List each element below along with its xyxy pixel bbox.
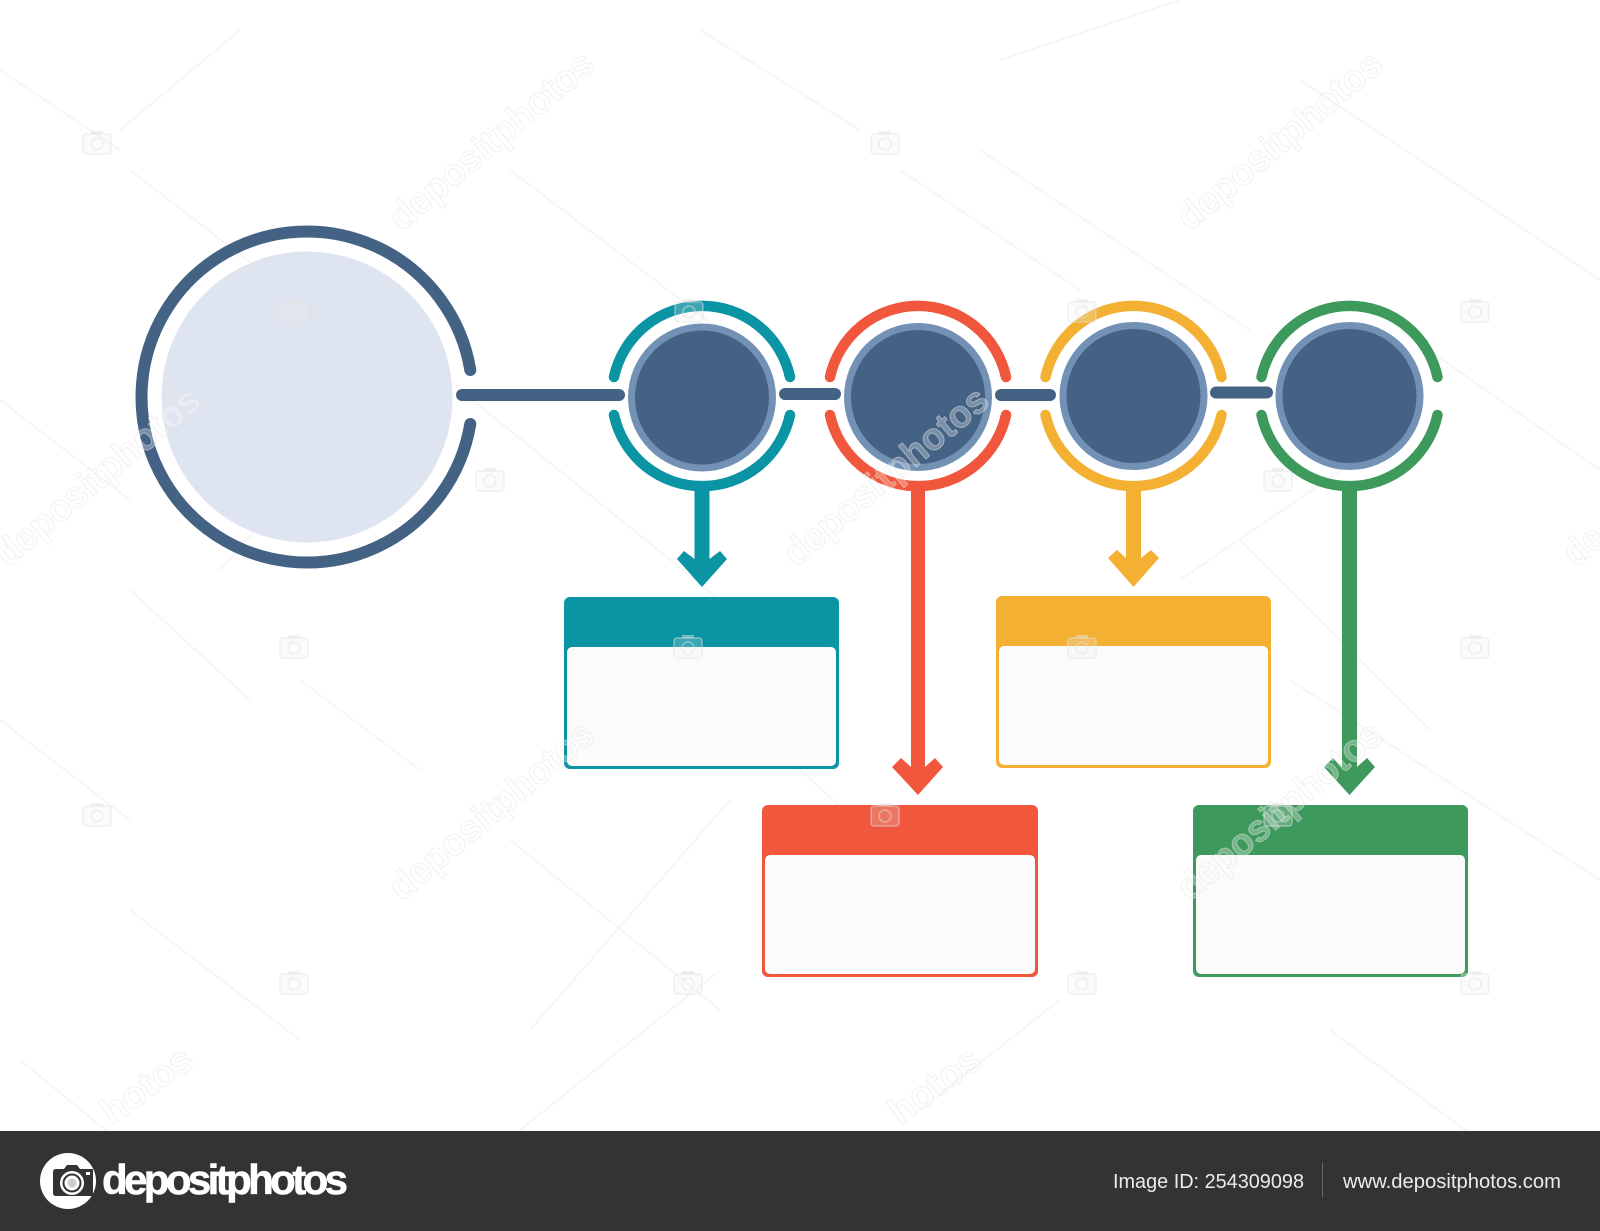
box: teal <box>564 597 839 769</box>
watermarks: depositphotos <box>381 713 603 909</box>
connector: node 3 to node 4 <box>1216 386 1267 398</box>
arrow: node 1 to teal box <box>677 488 727 587</box>
website: www.depositphotos.com <box>1342 1170 1561 1193</box>
watermarks: depositphotos <box>1169 43 1391 239</box>
watermark camera marks <box>83 131 1489 994</box>
image id: Image ID: 254309098 <box>1113 1170 1304 1193</box>
large circle open ring <box>142 232 470 563</box>
watermarks: hotos <box>881 1038 989 1133</box>
node 3: yellow <box>1046 306 1222 486</box>
watermarks: depositphotos <box>1169 713 1391 909</box>
watermarks: hotos <box>93 1038 201 1133</box>
node 4: green <box>1262 306 1438 486</box>
box: red <box>762 805 1038 977</box>
box: yellow <box>996 596 1271 768</box>
logo wordmark: depositphotos <box>102 1156 348 1203</box>
footer bar <box>0 1131 1600 1231</box>
node 1: teal <box>614 306 790 486</box>
logo icon: camera <box>40 1153 96 1209</box>
watermarks: depositphotos <box>775 379 997 575</box>
large circle fill <box>162 252 452 542</box>
arrow: node 3 to yellow box <box>1108 488 1159 587</box>
connector: node 2 to node 3 <box>1001 389 1050 401</box>
arrow: node 4 to green box <box>1324 488 1375 795</box>
watermarks: depositphotos <box>381 43 603 239</box>
central large circle <box>142 232 470 563</box>
box: green <box>1193 805 1468 977</box>
arrow: node 2 to red box <box>892 488 943 795</box>
node 2: red <box>830 306 1006 486</box>
separator <box>1322 1163 1324 1197</box>
connector: large circle to node 1 <box>462 389 619 401</box>
connector: node 1 to node 2 <box>785 388 835 400</box>
